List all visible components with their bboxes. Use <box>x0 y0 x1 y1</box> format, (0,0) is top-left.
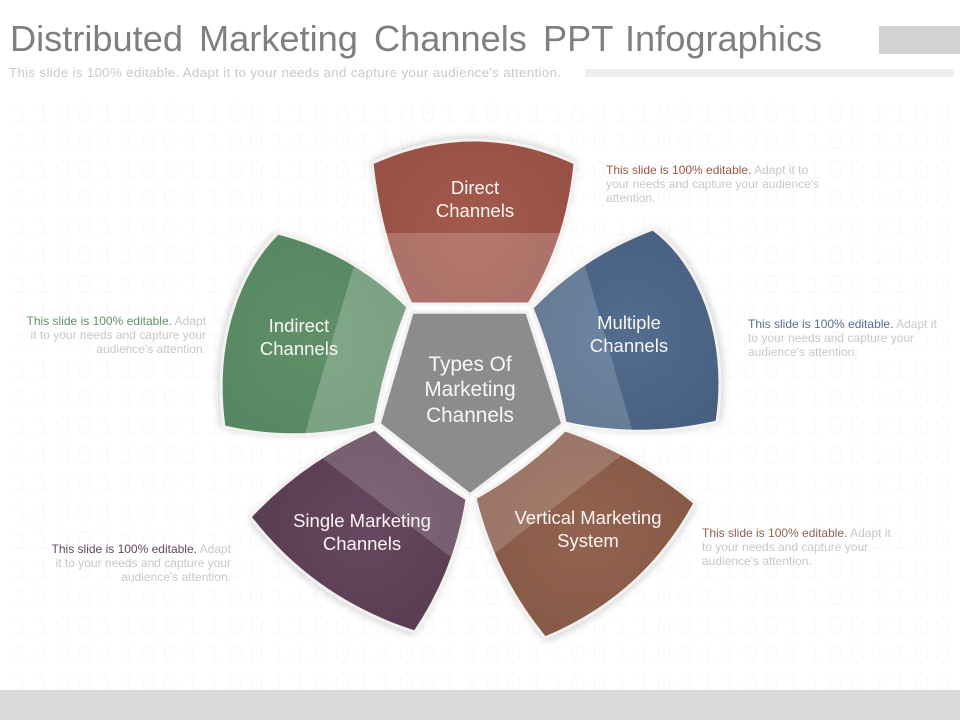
binary watermark pattern: 11001100110011001100110011001100110011001100 <box>12 499 956 530</box>
callout: single: This slide is 100% editable. Adapt <box>52 542 231 556</box>
callout: indirect: audience's attention. <box>96 342 206 356</box>
binary watermark pattern: 11001100110011001100110011001100110011001100 <box>12 613 956 644</box>
callout: direct: This slide is 100% editable. Adapt it to <box>606 163 808 177</box>
highlight band <box>534 266 632 430</box>
binary watermark pattern: 11001100110011001100110011001100110011001100 <box>12 157 956 188</box>
label: Channels <box>436 200 514 221</box>
label: Channels <box>323 533 401 554</box>
binary watermark pattern: 11001100110011001100110011001100110011001100 <box>12 470 956 501</box>
callout: vertical: This slide is 100% editable. Adapt it <box>702 526 891 540</box>
label: Vertical Marketing <box>514 507 662 528</box>
binary watermark pattern: 11001100110011001100110011001100110011001100 <box>12 670 956 701</box>
center label: Types Of <box>428 353 512 376</box>
binary watermark pattern: 11001100110011001100110011001100110011001100 <box>12 185 956 216</box>
label: Channels <box>260 338 338 359</box>
title: Distributed <box>10 18 183 59</box>
binary watermark pattern: 11001100110011001100110011001100110011001100 <box>12 356 956 387</box>
binary watermark pattern: 11001100110011001100110011001100110011001100 <box>12 328 956 359</box>
center label: Marketing <box>424 378 516 401</box>
callout: indirect: This slide is 100% editable. Adapt <box>27 314 206 328</box>
label: Direct <box>451 177 499 198</box>
label: Multiple <box>597 312 661 333</box>
callout: single: audience's attention. <box>121 570 231 584</box>
callout: direct: your needs and capture your audience's <box>606 177 819 191</box>
callout: vertical: to your needs and capture your <box>702 540 868 554</box>
petal: Direct Channels <box>369 134 578 306</box>
petal: Vertical Marketing System <box>465 420 696 641</box>
title: Channels <box>374 18 527 59</box>
petal: Indirect Channels <box>218 233 420 440</box>
label: System <box>557 530 619 551</box>
binary watermark pattern: 11001100110011001100110011001100110011001100 <box>12 527 956 558</box>
petal: Multiple Channels <box>520 229 723 440</box>
center pentagon <box>379 312 563 495</box>
callout: indirect: it to your needs and capture your <box>31 328 206 342</box>
callout: multiple: to your needs and capture your <box>748 331 914 345</box>
petal: Single Marketing Channels <box>249 420 480 635</box>
title: Infographics <box>625 18 822 59</box>
binary watermark pattern: 11001100110011001100110011001100110011001100 <box>12 271 956 302</box>
binary watermark pattern: 11001100110011001100110011001100110011001100 <box>12 641 956 672</box>
label: Indirect <box>269 315 329 336</box>
callout: multiple: This slide is 100% editable. Adapt it <box>748 317 937 331</box>
label: Channels <box>590 335 668 356</box>
callout: single: it to your needs and capture your <box>56 556 231 570</box>
binary watermark pattern: 11001100110011001100110011001100110011001100 <box>12 100 956 131</box>
label: Single Marketing <box>293 510 431 531</box>
highlight band <box>305 266 406 433</box>
callout: vertical: audience's attention. <box>702 554 812 568</box>
center label: Channels <box>426 404 514 427</box>
binary watermark pattern: 11001100110011001100110011001100110011001100 <box>12 556 956 587</box>
footer band <box>0 690 960 720</box>
binary watermark pattern: 11001100110011001100110011001100110011001100 <box>12 442 956 473</box>
binary watermark pattern: 11001100110011001100110011001100110011001100 <box>12 385 956 416</box>
binary watermark pattern: 11001100110011001100110011001100110011001100 <box>12 299 956 330</box>
binary watermark pattern: 11001100110011001100110011001100110011001100 <box>12 242 956 273</box>
subtitle: This slide is 100% editable. Adapt it to your needs and capture your audience's attention. <box>9 65 561 80</box>
header rule bar <box>585 69 954 77</box>
binary watermark pattern: 11001100110011001100110011001100110011001100 <box>12 128 956 159</box>
highlight band <box>476 432 622 553</box>
callout: direct: attention. <box>606 191 655 205</box>
highlight band <box>323 431 466 557</box>
binary watermark pattern: 11001100110011001100110011001100110011001100 <box>12 214 956 245</box>
callout: multiple: audience's attention. <box>748 345 858 359</box>
title: Marketing <box>199 18 358 59</box>
title: PPT <box>543 18 613 59</box>
highlight band <box>386 233 560 302</box>
binary watermark pattern: 11001100110011001100110011001100110011001100 <box>12 584 956 615</box>
header grey block <box>879 26 960 54</box>
binary watermark pattern: 11001100110011001100110011001100110011001100 <box>12 413 956 444</box>
